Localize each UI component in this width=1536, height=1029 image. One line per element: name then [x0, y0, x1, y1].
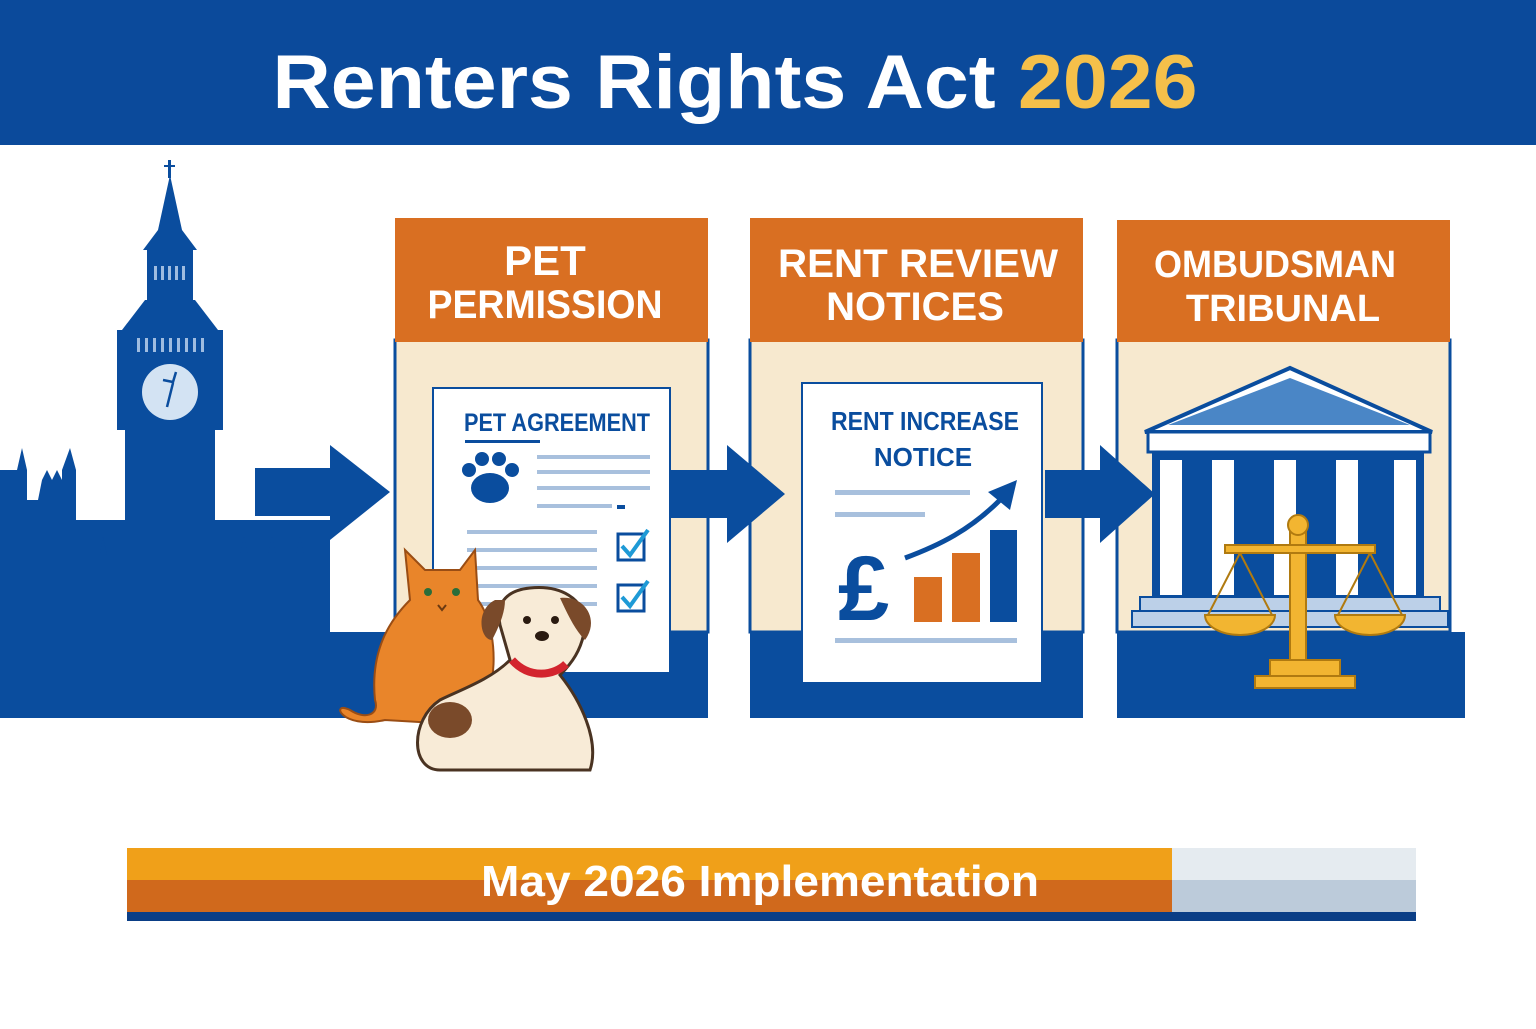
- arrow 2: [670, 445, 785, 543]
- icon: courthouse with scales: [1132, 368, 1448, 688]
- panel: ombudsman tribunal: [1117, 220, 1465, 718]
- document: rent increase notice: NOTICE: [874, 442, 972, 472]
- document: rent increase notice: RENT INCREASE: [831, 406, 1019, 436]
- heading: rent review notices: RENT REVIEW: [778, 242, 1058, 286]
- document: pet agreement: PET AGREEMENT: [464, 409, 650, 437]
- progress bar: May 2026 implementation: [127, 848, 1416, 921]
- header banner: [0, 0, 1536, 145]
- progress bar: May 2026 implementation: May 2026 Implementation: [481, 857, 1039, 906]
- panel: pet permission: [395, 218, 708, 718]
- arrow 1: [255, 445, 390, 540]
- heading: ombudsman tribunal: OMBUDSMAN: [1154, 244, 1396, 286]
- arrow 3: [1045, 445, 1155, 543]
- document: rent increase notice: £: [838, 538, 889, 640]
- panel: pet permission: PERMISSION: [428, 283, 662, 327]
- document: pet agreement: [433, 388, 670, 673]
- panel: rent review notices: NOTICES: [826, 285, 1004, 329]
- heading: pet permission: PET: [504, 237, 586, 284]
- panel: rent review notices: [750, 218, 1083, 718]
- skyline: Big Ben and Parliament: [0, 160, 400, 718]
- title: Renters Rights Act 2026: [272, 40, 1198, 125]
- document: rent increase notice: [802, 383, 1042, 683]
- illustration: cat: [340, 550, 494, 725]
- panel: ombudsman tribunal: TRIBUNAL: [1186, 288, 1380, 330]
- illustration: dog: [418, 588, 593, 770]
